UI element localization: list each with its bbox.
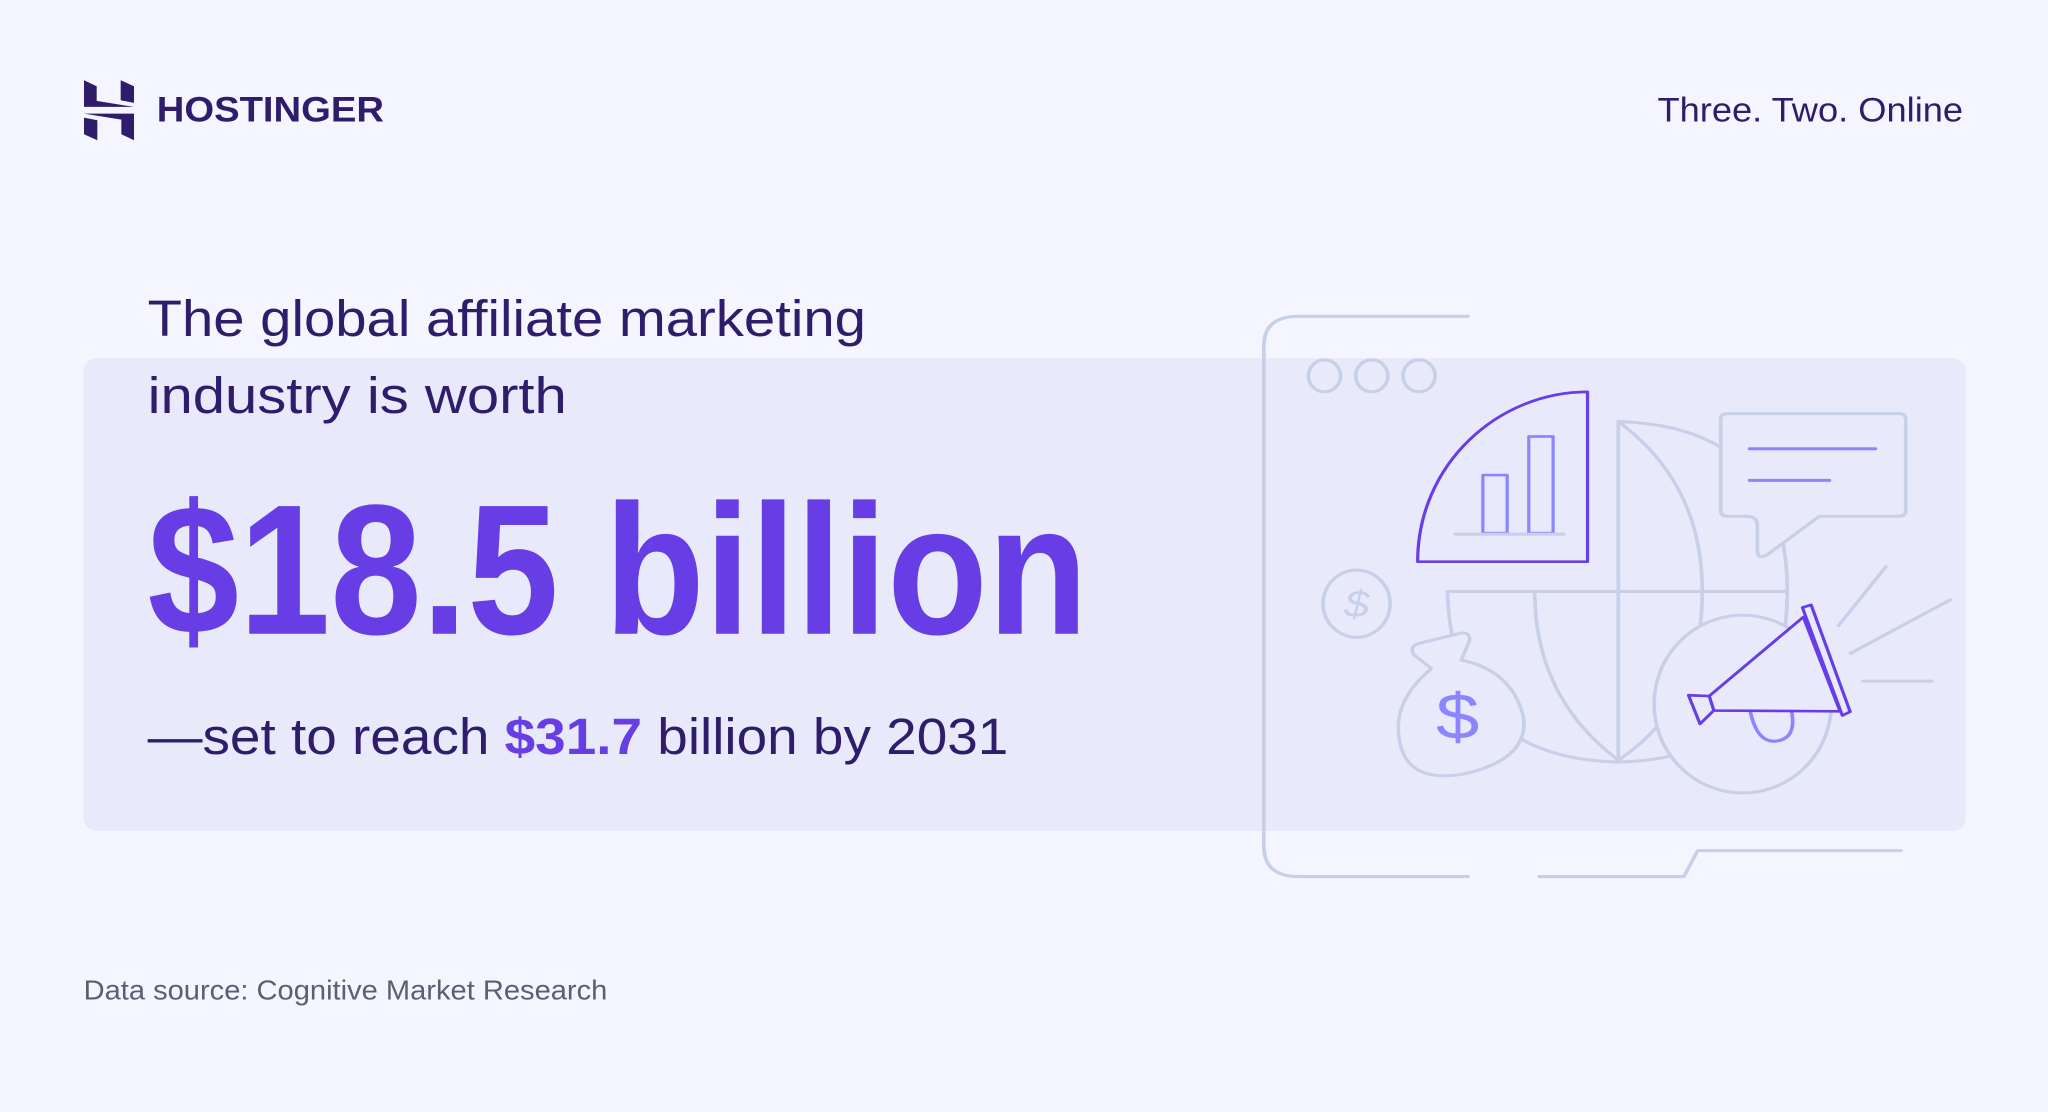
heading text: industry is worth [148, 367, 567, 424]
device frame [1264, 316, 1901, 877]
big number: $18.5 billion [148, 467, 1088, 674]
illustration [1264, 316, 1950, 877]
bar chart card [1418, 392, 1588, 562]
speech bubble [1721, 414, 1906, 557]
icon: coin [1323, 570, 1390, 637]
heading text: The global affiliate marketing [148, 290, 866, 347]
tagline: Three. Two. Online [1657, 92, 1963, 130]
icon: megaphone [1689, 605, 1850, 741]
subtext: —set to reach $31.7 billion by 2031 [148, 708, 1008, 765]
globe [1448, 422, 1787, 762]
logo wordmark: HOSTINGER [157, 91, 384, 130]
panel: highlight band [84, 358, 1966, 831]
rays [1839, 567, 1950, 681]
icon: money bag: $ [1436, 681, 1479, 754]
icon: coin: $ [1343, 583, 1371, 625]
heading text [148, 290, 866, 424]
logo [84, 80, 384, 140]
icon: money bag [1398, 633, 1524, 776]
icon: hostinger mark [84, 80, 134, 140]
source: Data source: Cognitive Market Research [84, 974, 607, 1005]
megaphone circle [1654, 615, 1831, 793]
